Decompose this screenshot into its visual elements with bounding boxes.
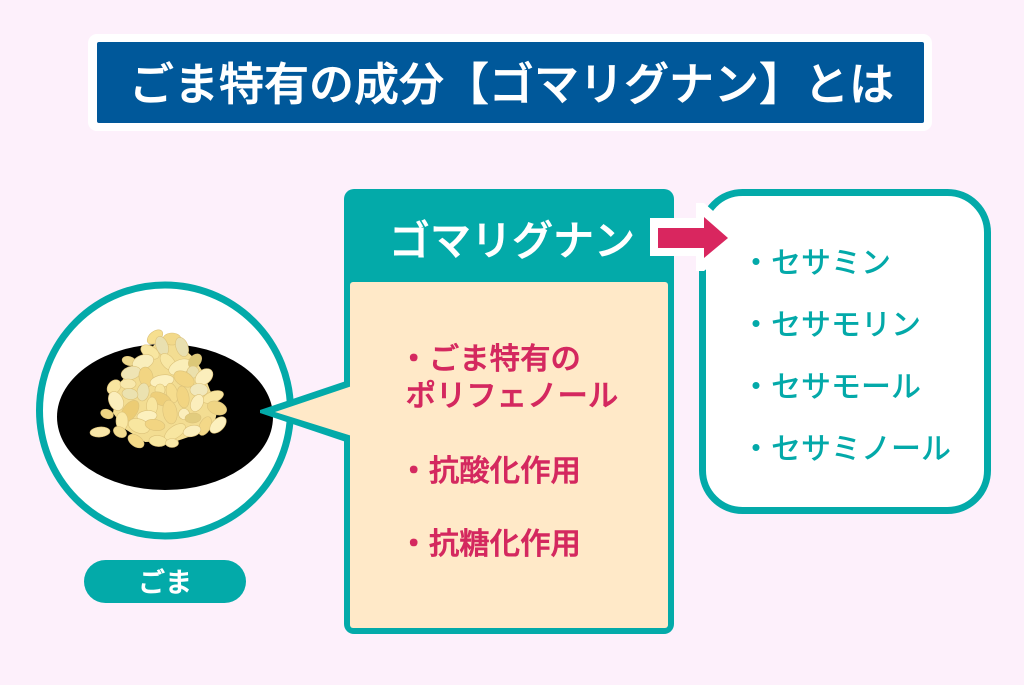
text block: features: ポリフェノール <box>406 379 618 413</box>
text block: lignan names: ・セサモール <box>741 371 921 404</box>
text block: features <box>398 342 618 561</box>
title banner: ごま特有の成分【ゴマリグナン】とは <box>129 59 894 110</box>
arrow <box>650 203 744 271</box>
panel: lignan list <box>702 192 988 510</box>
text block: lignan names <box>741 247 951 466</box>
text block: features: ・抗糖化作用 <box>398 527 581 561</box>
label: ごま <box>84 560 246 603</box>
text block: features: ・抗酸化作用 <box>398 454 581 488</box>
text block: features: ・ごま特有の <box>398 342 581 376</box>
panel: sesame illustration circle <box>40 285 290 536</box>
text block: lignan names: ・セサモリン <box>741 309 921 342</box>
icon: black plate <box>57 344 273 490</box>
icon: sesame seed pile <box>90 327 229 451</box>
callout pointer <box>260 381 346 442</box>
panel: ゴマリグナン callout <box>260 189 674 634</box>
panel heading: ゴマリグナン <box>389 218 635 264</box>
label: ごま: ごま <box>138 568 192 598</box>
text block: lignan names: ・セサミン <box>741 247 891 280</box>
text block: lignan names: ・セサミノール <box>741 433 951 466</box>
title banner <box>88 34 932 131</box>
